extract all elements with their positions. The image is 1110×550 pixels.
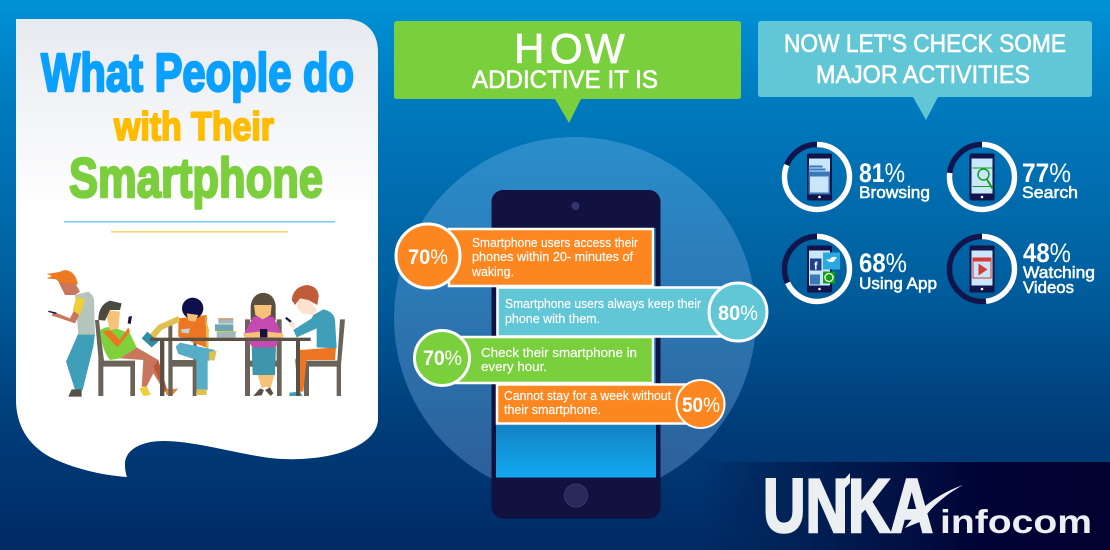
person: sitting man in green [98,301,178,396]
activity: search 77% [950,144,1078,210]
person: woman in magenta [243,293,283,396]
background circle behind phone [394,137,756,499]
icon: phone with magnifier [970,154,994,200]
stat bar: 70% check every hour [414,330,653,386]
person: man in blue sweater [285,285,337,396]
donut ring: 77% [950,144,1014,210]
donut ring: 68% [784,236,850,302]
logo: Unika infocom: infocom [940,503,1092,540]
stat bar: 70% check every hour: every hour. [481,359,547,374]
activity: watching videos 48%: Videos [1023,278,1074,297]
stat bar: 70% check every hour: 70% [423,347,462,370]
stat bar: 80% always keep phone: 80% [718,302,758,325]
donut ring: 48% [950,236,1014,302]
stat bar: 70% access within 20 minutes: waking. [471,264,514,279]
person: man in orange vest [142,298,217,395]
table [150,338,311,396]
illustration: people using smartphones at a table [47,270,345,397]
heading box: how addictive it is [394,21,741,123]
heading box: major activities: NOW LET'S CHECK SOME [784,30,1066,58]
icon: phone with social apps: f [814,260,818,272]
chair: second person [95,320,135,396]
stat bar: 70% access within 20 minutes: phones within 20- minutes of [472,249,633,264]
activity: using app 68%: 68% [859,248,907,278]
activity: browsing 81% [784,144,930,210]
stat bar: 70% access within 20 minutes: Smartphone users access their [472,235,639,250]
stat circle: 50% [676,380,724,428]
activity: search 77%: Search [1022,183,1078,202]
stack of books [215,318,236,338]
activity: search 77%: 77% [1022,158,1071,188]
heading box: how addictive it is: HOW [514,25,625,72]
stat bar: 50% cannot stay a week: Cannot stay for a week without [504,388,671,403]
stat bar: 80% always keep phone [498,283,767,341]
activity: using app 68% [784,236,937,302]
logo: Unika infocom [763,464,1092,549]
donut ring: 81% [784,144,850,210]
stat bar: 70% check every hour: Check their smartphone in [481,345,637,360]
heading box: major activities [758,21,1092,120]
logo: Unika infocom: UNKA [763,464,933,549]
stat bar: 70% access within 20 minutes: 70% [408,246,448,269]
icon: phone with browser windows [807,154,832,200]
heading: with Their: with Their [113,105,274,149]
activity: browsing 81%: Browsing [859,183,930,202]
stat bar: 80% always keep phone: Smartphone users always keep their [505,296,702,311]
icon: phone with video player [970,246,994,292]
activity: watching videos 48% [950,236,1095,302]
person: standing man [47,270,95,397]
chair: fourth person [245,319,282,396]
stat bar: 80% always keep phone: phone with them. [505,311,600,326]
icon: phone with social apps [807,246,840,292]
logo band [700,462,1110,550]
heading box: major activities: MAJOR ACTIVITIES [816,61,1030,89]
phone illustration [492,190,660,518]
stat bar: 50% cannot stay a week [497,380,724,428]
stat bar: 50% cannot stay a week: 50% [682,394,720,417]
activity: browsing 81%: 81% [859,158,905,188]
heading: What People do: What People do [41,43,354,103]
activity: watching videos 48%: Watching [1023,263,1095,282]
activity: using app 68%: Using App [859,274,937,293]
chair: third person [168,323,197,396]
activity: watching videos 48%: 48% [1023,238,1071,268]
heading: Smartphone: Smartphone [69,146,323,209]
chair: fifth person [304,319,345,396]
heading box: how addictive it is: ADDICTIVE IT IS [472,66,658,94]
panel: title speech bubble [16,19,378,477]
stat bar: 70% access within 20 minutes [396,224,653,288]
stat circle: 70% [396,224,460,288]
stat circle: 70% [414,330,470,386]
stat bar: 50% cannot stay a week: their smartphone. [504,402,601,417]
stat circle: 80% [709,283,767,341]
